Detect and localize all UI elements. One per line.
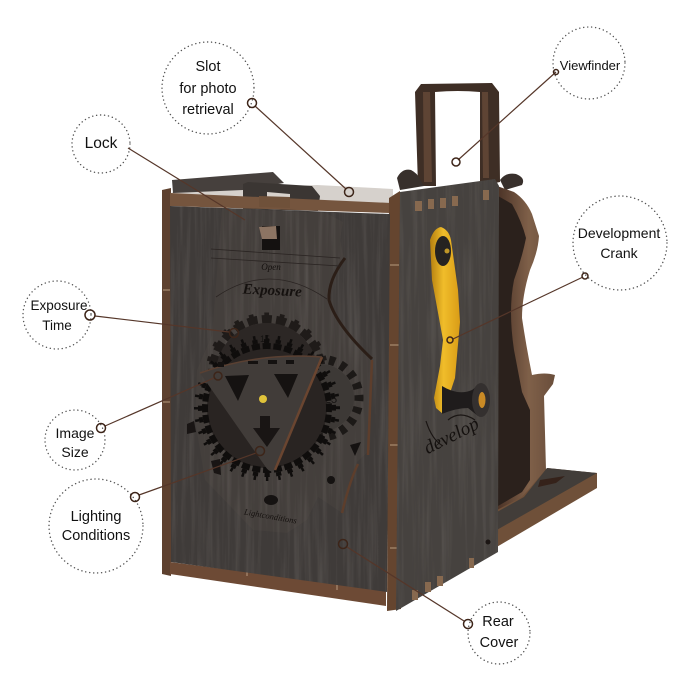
label: Rear Cover: Cover [480,635,519,651]
label: Lighting Conditions: Conditions [62,528,130,544]
label: Exposure Time: Exposure [30,298,88,313]
right gear [281,359,359,437]
side face [396,179,499,611]
right gear: 25 [325,394,337,406]
label: Lighting Conditions: Lighting [71,509,121,525]
label: Lighting Conditions [49,479,143,573]
label: Slot for photo retrieval: Slot [196,59,220,75]
label: Rear Cover [468,602,530,664]
label: Slot for photo retrieval: for photo [179,81,237,97]
connector: slot [248,98,354,196]
exposure engraving: Exposure [241,281,303,301]
label: Slot for photo retrieval [162,42,254,134]
shutter window [259,226,280,250]
lighting condition engraving: Lightconditions [242,506,298,526]
label: Rear Cover: Rear [482,614,514,630]
label: Lock [72,115,130,173]
develop engraving: develop [420,413,483,459]
label: Slot for photo retrieval: retrieval [182,102,234,118]
label: Lock: Lock [85,135,118,152]
label: Development Crank: Development [578,225,660,241]
connector: exposure time [85,310,238,338]
lighting condition engraving [187,421,361,526]
connector: viewfinder [452,70,558,166]
label: Exposure Time: Time [42,318,72,333]
upper gear: 15 [260,334,270,344]
front frame [162,188,401,611]
connector: development crank [447,273,588,343]
base plate [495,468,597,548]
main gear [196,337,338,479]
label: Development Crank: Crank [600,245,639,261]
exposure cover plate [195,208,372,533]
triangular dial plate [200,356,322,471]
exposure engraving [241,262,303,301]
label: Image Size: Image [56,425,95,441]
connector: rear cover [338,540,472,628]
camera body [162,83,597,611]
connector: image size [96,372,222,432]
upper gear [207,314,327,434]
label: Exposure Time [23,281,91,349]
connector: lighting conditions [130,446,264,502]
connector: lock [128,148,245,220]
label: Image Size [45,410,105,470]
front face [170,206,390,592]
exposure engraving: Open [261,262,281,272]
rear wooden panel [497,186,555,510]
label: Development Crank [573,196,667,290]
label: Viewfinder: Viewfinder [560,58,621,73]
viewfinder frame [397,83,523,190]
lid and top [170,172,393,211]
label: Image Size: Size [61,444,89,460]
development crank [430,227,490,417]
label: Viewfinder [553,27,625,99]
